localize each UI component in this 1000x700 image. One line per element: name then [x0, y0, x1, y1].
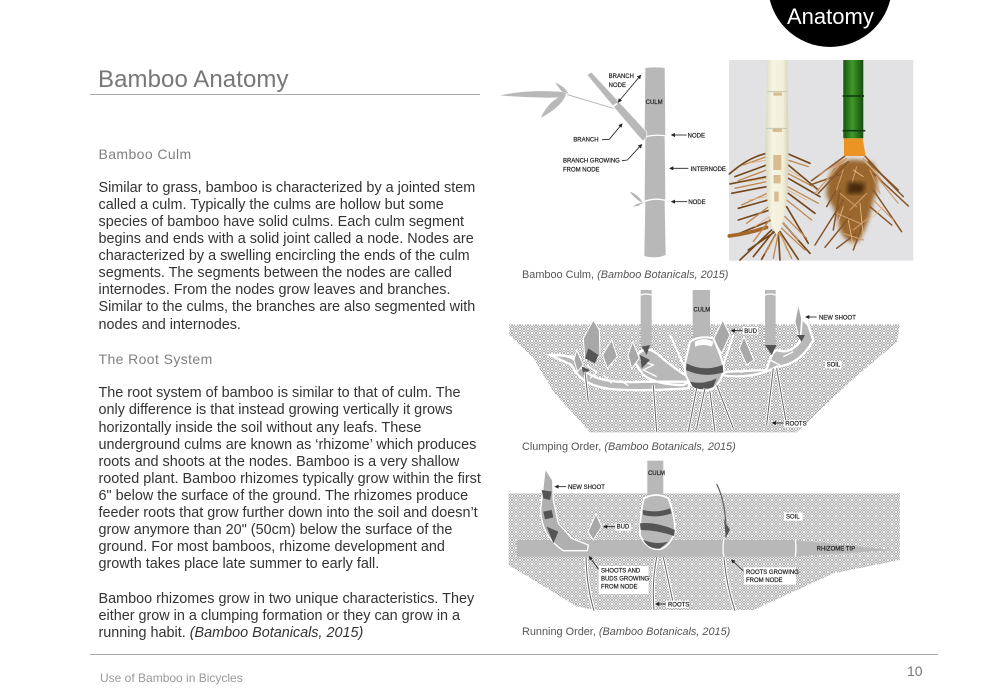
heading: root system: The Root System — [98, 351, 213, 367]
clumping labels: NEW SHOOT — [819, 315, 856, 321]
text: root system: only difference is that instead growing vertically it grows — [98, 402, 453, 418]
text: root system: underground culms are known as ‘rhizome’ which produces — [98, 437, 476, 453]
title rule — [90, 94, 480, 95]
green rhizome roots — [810, 156, 908, 250]
culm labels: BRANCH — [573, 138, 599, 144]
section label: Anatomy — [787, 4, 874, 28]
rhizome swelling — [640, 495, 675, 549]
text: root system: The root system of bamboo is similar to that of culm. The — [98, 385, 461, 401]
culm annotation arrows — [602, 75, 688, 202]
text: bamboo culm: species of bamboo have solid culms. Each culm segment — [98, 214, 464, 230]
soil — [509, 324, 900, 432]
text: bamboo culm: called a culm. Typically the culms are hollow but some — [98, 197, 444, 213]
roots — [585, 368, 787, 432]
clumping labels: BUD — [744, 329, 758, 335]
tab: section circle — [768, 0, 892, 47]
text: growth habits: either grow in a clumping formation or they can grow in a — [98, 608, 460, 624]
clumping labels: SOIL — [827, 363, 841, 369]
culm labels: NODE — [688, 200, 706, 206]
rhizomes — [550, 318, 813, 390]
roots — [586, 557, 735, 611]
heading: bamboo culm: Bamboo Culm — [98, 146, 192, 162]
running labels: FROM NODE — [746, 578, 783, 584]
culm — [647, 461, 663, 496]
green rhizome — [843, 60, 863, 138]
footer rule — [90, 654, 938, 655]
text: bamboo culm — [98, 180, 475, 333]
text: bamboo culm: segments. The segments between the nodes are called — [98, 265, 452, 281]
footer title: Use of Bamboo in Bicycles — [100, 671, 243, 685]
rhizome — [517, 540, 893, 557]
diagram: clumping order — [509, 290, 900, 432]
photo: bamboo rhizomes with roots — [729, 60, 913, 261]
culm labels — [563, 74, 726, 206]
culm labels: BRANCH — [609, 74, 634, 80]
text: growth habits: Bamboo rhizomes grow in two unique characteristics. They — [98, 591, 474, 607]
text: root system: grow anymore than 20" (50cm) below the surface of the — [98, 522, 452, 538]
diagram: bamboo culm — [500, 67, 726, 257]
clumping labels: CULM — [693, 308, 710, 314]
text: bamboo culm: internodes. From the nodes grow leaves and branches. — [98, 282, 450, 298]
upper shoot on node — [717, 484, 726, 537]
white rhizome — [765, 60, 789, 235]
text: bamboo culm: Similar to the culms, the branches are also segmented with — [98, 299, 475, 315]
running labels: ROOTS — [668, 603, 689, 609]
text: root system: feeder roots that grow further down into the soil and doesn’t — [98, 505, 478, 521]
running labels — [568, 471, 855, 609]
white rhizome roots — [729, 153, 820, 260]
text: bamboo culm: nodes and internodes. — [98, 317, 241, 333]
branch — [587, 72, 647, 141]
caption: culm: Bamboo Culm, (Bamboo Botanicals, 2015) — [522, 269, 728, 281]
clumping labels — [693, 308, 856, 428]
title: Bamboo Anatomy — [98, 66, 289, 93]
text: root system: roots and shoots at the nodes. Bamboo is a very shallow — [98, 454, 459, 470]
leaves — [500, 82, 568, 118]
clumping arrows — [732, 317, 817, 423]
diagram: running order — [509, 461, 900, 611]
text: root system: 6" below the surface of the ground. The rhizomes produce — [98, 488, 468, 504]
culm labels: BRANCH GROWING — [563, 159, 620, 165]
caption: clumping: Clumping Order, (Bamboo Botanicals, 2015) — [522, 441, 736, 453]
clumping labels: ROOTS — [785, 422, 807, 428]
running labels: SHOOTS AND — [601, 568, 641, 574]
text: bamboo culm: characterized by a swelling encircling the ends of the culm — [98, 248, 470, 264]
running labels: RHIZOME TIP — [817, 547, 855, 553]
culm labels: NODE — [609, 83, 626, 89]
running labels: NEW SHOOT — [568, 485, 605, 491]
text: root system: growth takes place late summer to early fall. — [98, 556, 379, 572]
text: root system: ground. For most bamboos, rhizome development and — [98, 539, 445, 555]
running labels: BUD — [617, 525, 630, 531]
new shoot — [541, 468, 588, 551]
text: bamboo culm: Similar to grass, bamboo is characterized by a jointed stem — [98, 180, 475, 196]
culm labels: FROM NODE — [563, 168, 600, 174]
text: growth habits — [98, 591, 474, 641]
culms — [641, 290, 776, 348]
running labels: SOIL — [786, 515, 800, 521]
shoots and buds — [574, 304, 802, 372]
text: root system: rooted plant. Bamboo rhizomes typically grow within the first — [98, 471, 481, 487]
culm labels: NODE — [688, 134, 705, 140]
caption: running: Running Order, (Bamboo Botanicals, 2015) — [522, 626, 730, 638]
soil — [509, 493, 900, 610]
text: bamboo culm: begins and ends with a solid joint called a node. Nodes are — [98, 231, 474, 247]
page number: 10 — [907, 663, 923, 679]
text: growth habits: running habit. (Bamboo Botanicals, 2015) — [98, 625, 363, 641]
running labels: ROOTS GROWING — [746, 570, 799, 576]
text: root system — [98, 385, 481, 572]
bud — [588, 514, 602, 540]
center rhizome — [685, 337, 724, 391]
running labels: CULM — [648, 471, 665, 477]
culm labels: INTERNODE — [691, 167, 726, 173]
running labels: FROM NODE — [601, 584, 638, 590]
culm stem — [644, 67, 666, 257]
culm labels: CULM — [646, 100, 663, 106]
running arrows — [555, 487, 743, 604]
running labels: BUDS GROWING — [601, 576, 650, 582]
text: root system: horizontally inside the soil without any leafs. These — [98, 420, 421, 436]
